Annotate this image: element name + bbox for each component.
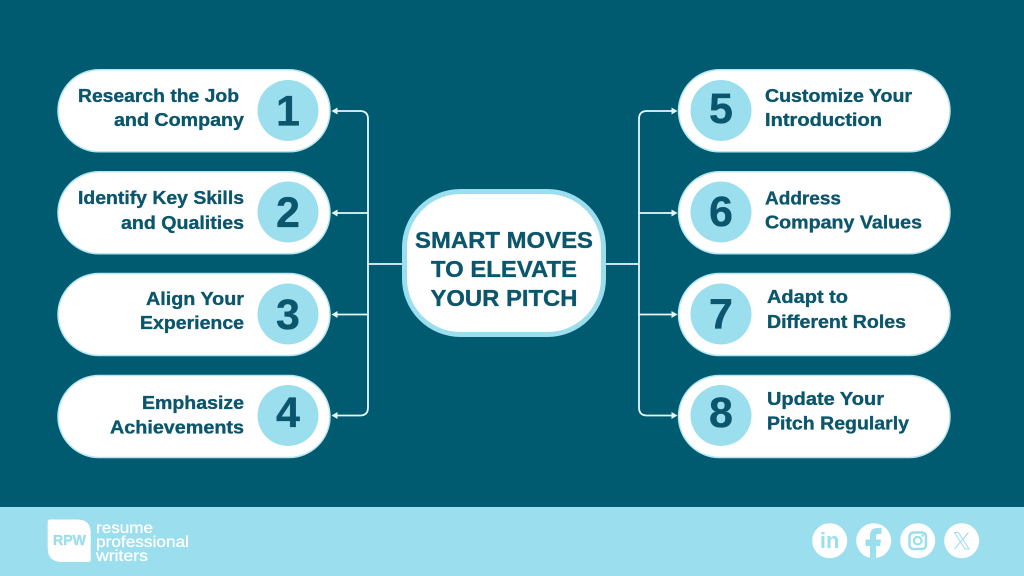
step 3: Experience [140, 313, 244, 333]
logo wordmark: writers [95, 548, 148, 565]
icon: Facebook [856, 523, 891, 558]
footer band [0, 507, 1024, 576]
step 6: Company Values [765, 212, 922, 232]
central title box [404, 192, 604, 334]
step 2 [58, 172, 330, 254]
logo wordmark [95, 520, 189, 565]
icon: LinkedIn [812, 523, 847, 558]
step 3: 3 [276, 291, 300, 339]
step 1: Research the Job [78, 86, 239, 106]
step 7: 7 [709, 290, 733, 338]
step 5 [678, 70, 950, 152]
logo badge: RPW [53, 533, 86, 549]
step 1: 1 [276, 88, 300, 136]
logo [48, 520, 189, 565]
step 2: 2 [276, 189, 300, 237]
step 5: 5 [709, 85, 733, 133]
left connector arrows [332, 108, 402, 419]
icon: Instagram [900, 523, 935, 558]
step 1 [58, 70, 330, 152]
step 5: Introduction [765, 110, 882, 130]
step 7: Different Roles [767, 312, 906, 332]
step 2: and Qualities [121, 213, 244, 233]
step 4 [58, 376, 330, 458]
icon: LinkedIn: in [820, 528, 839, 553]
step 7: Adapt to [767, 287, 848, 307]
step 6: Address [765, 188, 841, 208]
step 8: Pitch Regularly [767, 414, 909, 434]
title [415, 227, 593, 311]
step 6: 6 [709, 188, 733, 236]
title: SMART MOVES [415, 227, 593, 253]
step 4: Achievements [110, 418, 244, 438]
title: TO ELEVATE [431, 256, 577, 282]
logo wordmark: professional [96, 534, 189, 551]
logo badge [48, 520, 91, 562]
step 4: 4 [276, 389, 300, 437]
step 1: and Company [114, 110, 244, 130]
step 5: Customize Your [765, 86, 912, 106]
step 4: Emphasize [142, 393, 244, 413]
step 3: Align Your [146, 289, 244, 309]
title: YOUR PITCH [430, 285, 578, 311]
step 8 [678, 376, 950, 458]
step 3 [58, 274, 330, 356]
step 6 [678, 172, 950, 254]
right connector arrows [606, 108, 678, 419]
step 8: 8 [709, 389, 733, 437]
step 2: Identify Key Skills [78, 188, 244, 208]
step 8: Update Your [767, 389, 884, 409]
logo wordmark: resume [96, 520, 153, 537]
icon: X [944, 523, 979, 558]
step 7 [678, 274, 950, 356]
